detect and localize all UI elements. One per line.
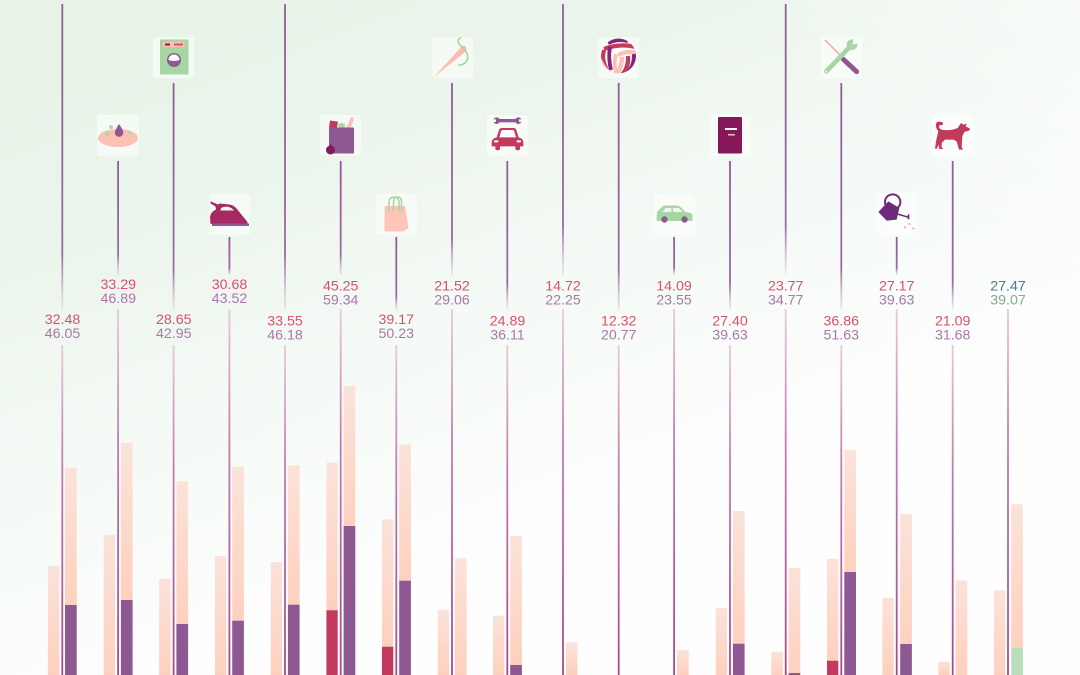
column 4: bars, line, values and iron icon — [209, 194, 250, 675]
column 9: bars, line, values and car repair icon: 24.89 — [490, 314, 525, 330]
column 15: bars, line, values and tools icon — [821, 37, 862, 675]
column 3: bars, line, values and washing machine icon — [153, 37, 194, 675]
icon: iron — [209, 194, 250, 235]
column 15: bars, line, values and tools icon: 51.63 — [824, 328, 859, 344]
column 5: bars, line and values: 46.18 — [267, 328, 303, 344]
column 2: bars, line, values and dish icon: 46.89 — [101, 291, 136, 307]
column 17: bars, line, values and dog icon: 31.68 — [935, 328, 971, 344]
column 16: bars, line, values and watering can icon: 27.17 — [879, 278, 915, 294]
column 10: bars, line and values: 14.72 — [545, 278, 581, 294]
column 2: bars, line, values and dish icon — [97, 115, 139, 675]
icon: car — [654, 194, 695, 235]
column 3: bars, line, values and washing machine icon: 28.65 — [156, 312, 192, 328]
icon: dish — [97, 115, 139, 156]
column 13: bars, line, values and book icon — [710, 115, 751, 675]
icon: washing machine — [153, 37, 194, 78]
column 18: bars, line and values: 39.07 — [990, 292, 1026, 308]
column 13: bars, line, values and book icon: 39.63 — [712, 328, 748, 344]
column 16: bars, line, values and watering can icon: 39.63 — [879, 292, 915, 308]
column 14: bars, line and values — [768, 4, 804, 675]
column 5: bars, line and values — [267, 4, 303, 675]
column 6: bars, line, values and groceries icon — [320, 115, 361, 675]
column 1: bars, line and values: 46.05 — [45, 326, 80, 342]
column 16: bars, line, values and watering can icon — [876, 193, 917, 675]
column 12: bars, line, values and car icon: 23.55 — [656, 292, 692, 308]
column 3: bars, line, values and washing machine icon: 42.95 — [156, 326, 192, 342]
column 2: bars, line, values and dish icon: 33.29 — [101, 277, 136, 293]
column 1: bars, line and values — [45, 4, 80, 675]
column 6: bars, line, values and groceries icon: 45.25 — [323, 278, 359, 294]
column 5: bars, line and values: 33.55 — [267, 314, 303, 330]
column 14: bars, line and values: 23.77 — [768, 278, 804, 294]
icon: watering can — [876, 193, 917, 234]
column 9: bars, line, values and car repair icon: 36.11 — [490, 328, 525, 344]
column 18: bars, line and values — [990, 278, 1026, 675]
column 4: bars, line, values and iron icon: 43.52 — [212, 291, 247, 307]
column 8: bars, line, values and needle icon — [432, 37, 473, 675]
column 15: bars, line, values and tools icon: 36.86 — [824, 314, 859, 330]
icon: volleyball — [598, 37, 639, 78]
column 11: line, values and volleyball icon — [598, 37, 639, 675]
column 1: bars, line and values: 32.48 — [45, 312, 80, 328]
column 11: line, values and volleyball icon: 12.32 — [601, 314, 637, 330]
column 13: bars, line, values and book icon: 27.40 — [712, 314, 748, 330]
icon: dog — [932, 115, 973, 156]
icon: book — [710, 115, 751, 156]
column 4: bars, line, values and iron icon: 30.68 — [212, 277, 247, 293]
column 9: bars, line, values and car repair icon — [487, 115, 528, 675]
column 10: bars, line and values — [545, 4, 581, 675]
column 12: bars, line, values and car icon — [654, 194, 695, 675]
column 17: bars, line, values and dog icon — [932, 115, 973, 675]
column 8: bars, line, values and needle icon: 29.06 — [434, 292, 470, 308]
column 8: bars, line, values and needle icon: 21.52 — [434, 278, 470, 294]
column 6: bars, line, values and groceries icon: 59.34 — [323, 292, 359, 308]
icon: groceries — [320, 115, 361, 156]
column 14: bars, line and values: 34.77 — [768, 292, 804, 308]
column 7: bars, line, values and shopping bag icon: 39.17 — [379, 312, 414, 328]
icon: car repair — [487, 115, 528, 156]
icon: shopping bag — [376, 194, 417, 235]
column 18: bars, line and values: 27.47 — [990, 278, 1026, 294]
column 7: bars, line, values and shopping bag icon: 50.23 — [379, 326, 414, 342]
column 17: bars, line, values and dog icon: 21.09 — [935, 314, 971, 330]
column 12: bars, line, values and car icon: 14.09 — [656, 278, 692, 294]
column 7: bars, line, values and shopping bag icon — [376, 194, 417, 675]
icon: tools — [821, 37, 862, 78]
icon: needle and thread — [432, 37, 473, 78]
column 11: line, values and volleyball icon: 20.77 — [601, 328, 637, 344]
column 10: bars, line and values: 22.25 — [545, 292, 581, 308]
